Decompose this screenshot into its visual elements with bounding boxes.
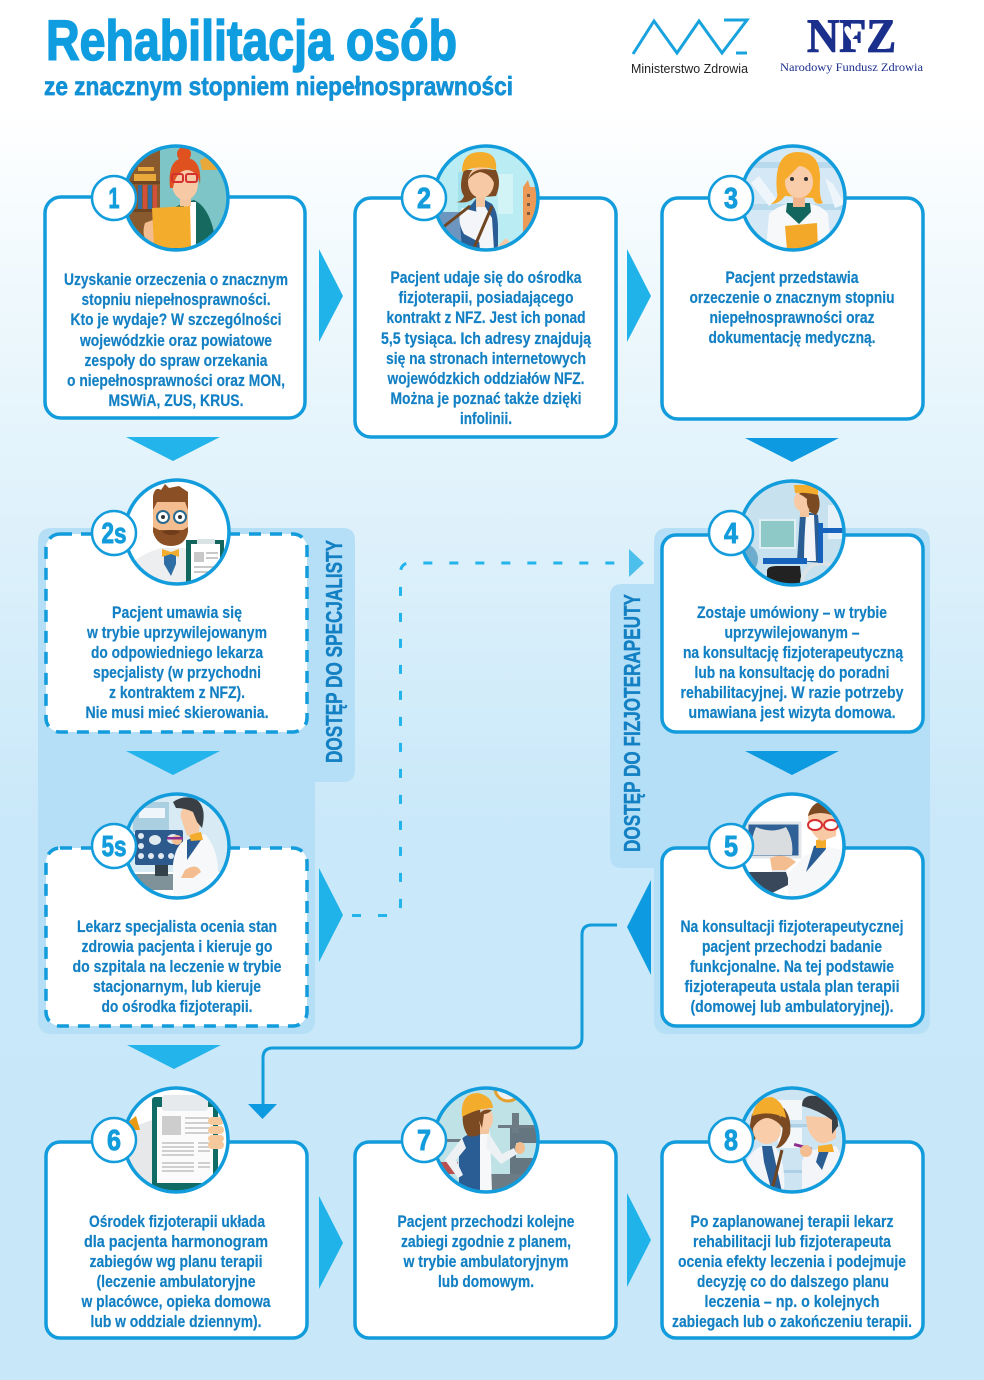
step text 3: niepełnosprawności oraz [710, 309, 874, 327]
step text 2s: z kontraktem z NFZ). [109, 684, 245, 702]
step text 4: umawiana jest wizyta domowa. [688, 704, 896, 722]
arrow: 4 to 5 [745, 751, 839, 775]
step text 1: o niepełnosprawności oraz MON, [67, 372, 285, 390]
number badge 1: 1 [108, 183, 120, 215]
step text 1: zespoły do spraw orzekania [84, 352, 268, 370]
icon: patient and doctor [740, 1088, 844, 1192]
step text 6: dla pacjenta harmonogram [84, 1233, 268, 1251]
step text 2: 5,5 tysiąca. Ich adresy znajdują [381, 330, 592, 348]
panel: step 5 [662, 794, 923, 1026]
connector: solid line from 5 to 6 [248, 925, 617, 1119]
step text 7: zabiegi zgodnie z planem, [401, 1233, 571, 1251]
icon: woman in hard hat at equipment [434, 1075, 538, 1192]
icon: woman with folder at bookshelf [124, 146, 228, 250]
number badge 2s: 2s [102, 518, 126, 550]
step text 2: Można je poznać także dzięki [390, 390, 582, 408]
step text 1: Kto je wydaje? W szczególności [70, 311, 282, 329]
arrow: 3 to 4 [745, 438, 839, 462]
step text 4: na konsultację fizjoterapeutyczną [683, 644, 904, 662]
arrow: 1 to 2s [126, 437, 220, 461]
icon: bearded doctor with clipboard [125, 480, 229, 587]
step text 5: Na konsultacji fizjoterapeutycznej [680, 918, 904, 936]
logo: NFZ: NFZ [807, 10, 896, 63]
number badge 5s: 5s [102, 831, 126, 863]
step text 1: wojewódzkie oraz powiatowe [79, 332, 272, 350]
connector: dashed line from 5s to 4 [352, 549, 644, 916]
step text 6: w placówce, opieka domowa [81, 1293, 271, 1311]
number badge 2 [402, 176, 446, 220]
panel: step 5s [46, 794, 307, 1026]
step text 7: w trybie ambulatoryjnym [403, 1253, 568, 1271]
step text 2: fizjoterapii, posiadającego [398, 289, 574, 307]
step text 1: MSWiA, ZUS, KRUS. [108, 392, 244, 410]
step text 2s: Nie musi mieć skierowania. [86, 704, 268, 722]
icon: woman in wheelchair at desk [742, 479, 846, 587]
step text 4: uprzywilejowanym – [724, 624, 860, 642]
step text 2: kontrakt z NFZ. Jest ich ponad [386, 309, 586, 327]
step text 2: wojewódzkich oddziałów NFZ. [387, 370, 584, 388]
number badge 7: 7 [417, 1125, 431, 1157]
icon: clipboard in hand [124, 1088, 228, 1195]
step text 4: Zostaje umówiony – w trybie [697, 604, 887, 622]
step text 2s: w trybie uprzywilejowanym [86, 624, 267, 642]
step text 5s: zdrowia pacjenta i kieruje go [82, 938, 272, 956]
step text 3: orzeczenie o znacznym stopniu [690, 289, 894, 307]
panel: step 7 [355, 1075, 616, 1338]
step text 2s: do odpowiedniego lekarza [91, 644, 264, 662]
step text 1 [64, 271, 288, 410]
step text 2s: Pacjent umawia się [112, 604, 242, 622]
step text 1: stopniu niepełnosprawności. [82, 291, 270, 309]
logo: NFZ [780, 10, 924, 74]
panel: step 8 [662, 1088, 923, 1338]
step text 8: zabiegach lub o zakończeniu terapii. [672, 1313, 912, 1331]
number badge 6 [92, 1118, 136, 1162]
step text 6: Ośrodek fizjoterapii układa [89, 1213, 266, 1231]
number badge 1 [92, 176, 136, 220]
icon: physiotherapist at ultrasound [740, 794, 846, 898]
arrow: 5s to 6 [127, 1045, 221, 1069]
number badge 2s [92, 511, 136, 555]
panel: step 6 [46, 1088, 307, 1338]
number badge 5s [92, 824, 136, 868]
step text 5 [680, 918, 904, 1016]
step text 4: rehabilitacyjnej. W razie potrzeby [680, 684, 904, 702]
logo: Ministerstwo Zdrowia [631, 20, 749, 76]
step text 3 [690, 269, 894, 347]
number badge 8: 8 [724, 1125, 738, 1157]
step text 2s: specjalisty (w przychodni [93, 664, 261, 682]
step text 5: funkcjonalne. Na tej podstawie [690, 958, 894, 976]
arrow: 7 to 8 [627, 1193, 651, 1287]
step text 8 [672, 1213, 912, 1331]
logo: NFZ: Narodowy Fundusz Zdrowia [780, 60, 924, 74]
step text 7: Pacjent przechodzi kolejne [398, 1213, 574, 1231]
step text 5s: do ośrodka fizjoterapii. [102, 998, 252, 1016]
step text 8: decyzję co do dalszego planu [697, 1273, 889, 1291]
icon: woman with bag and city [434, 146, 538, 250]
arrow: 2 to 3 [627, 249, 651, 342]
number badge 4: 4 [724, 518, 738, 550]
step text 8: ocenia efekty leczenia i podejmuje [678, 1253, 906, 1271]
step text 5s: Lekarz specjalista ocenia stan [77, 918, 277, 936]
step text 4 [680, 604, 904, 722]
step text 5s [72, 918, 282, 1016]
panel: step 2s [46, 480, 307, 732]
number badge 3 [709, 176, 753, 220]
step text 5s: do szpitala na leczenie w trybie [72, 958, 282, 976]
panel: step 1 [45, 146, 305, 418]
panel: step 3 [662, 146, 923, 419]
step text 5: fizjoterapeuta ustala plan terapii [684, 978, 900, 996]
step text 2: Pacjent udaje się do ośrodka [390, 269, 582, 287]
number badge 8 [709, 1118, 753, 1162]
subtitle: ze znacznym stopniem niepełnosprawności [44, 71, 513, 101]
step text 3: dokumentację medyczną. [708, 329, 876, 347]
step text 2 [381, 269, 592, 428]
panel: step 4 [662, 481, 923, 732]
panel: dostęp do fizjoterapeuty [610, 528, 930, 1034]
arrow: 6 to 7 [319, 1196, 343, 1289]
step text 4: lub na konsultację do poradni [694, 664, 890, 682]
step text 5s: stacjonarnym, lub kieruje [93, 978, 261, 996]
arrow: 2s to 5s [126, 751, 220, 775]
title: Rehabilitacja osób [46, 9, 457, 73]
step text 8: rehabilitacji lub fizjoterapeuta [693, 1233, 892, 1251]
step text 7: lub domowym. [438, 1273, 534, 1291]
number badge 6: 6 [107, 1125, 121, 1157]
step text 5: pacjent przechodzi badanie [702, 938, 882, 956]
logo: Ministerstwo Zdrowia: Ministerstwo Zdrowia [631, 61, 749, 76]
number badge 7 [402, 1118, 446, 1162]
step text 1: Uzyskanie orzeczenia o znacznym [64, 271, 288, 289]
label: dostęp do fizjoterapeuty: DOSTĘP DO FIZJOTERAPEUTY [619, 594, 645, 852]
label: dostęp do specjalisty: DOSTĘP DO SPECJALISTY [321, 540, 347, 763]
step text 2s [86, 604, 268, 722]
step text 2: infolinii. [460, 410, 512, 428]
step text 6: (leczenie ambulatoryjne [96, 1273, 256, 1291]
number badge 2: 2 [417, 183, 431, 215]
arrow: 5 to 6 [627, 880, 651, 975]
icon: woman in white coat with folder [741, 146, 845, 250]
step text 3: Pacjent przedstawia [726, 269, 859, 287]
arrow: 5s to 4 [319, 868, 343, 962]
number badge 3: 3 [724, 183, 738, 215]
panel: step 2 [355, 146, 616, 437]
step text 6: lub w oddziale dziennym). [90, 1313, 262, 1331]
step text 7 [398, 1213, 574, 1291]
step text 6 [81, 1213, 271, 1331]
icon: doctor viewing scans [125, 794, 229, 898]
number badge 5: 5 [724, 831, 738, 863]
step text 5: (domowej lub ambulatoryjnej). [690, 998, 894, 1016]
number badge 5 [709, 824, 753, 868]
step text 2: się na stronach internetowych [386, 350, 586, 368]
step text 8: leczenia – np. o kolejnych [704, 1293, 880, 1311]
number badge 4 [709, 511, 753, 555]
panel: dostęp do specjalisty [38, 528, 355, 1034]
step text 6: zabiegów wg planu terapii [90, 1253, 262, 1271]
step text 8: Po zaplanowanej terapii lekarz [690, 1213, 894, 1231]
arrow: 1 to 2 [319, 249, 343, 342]
